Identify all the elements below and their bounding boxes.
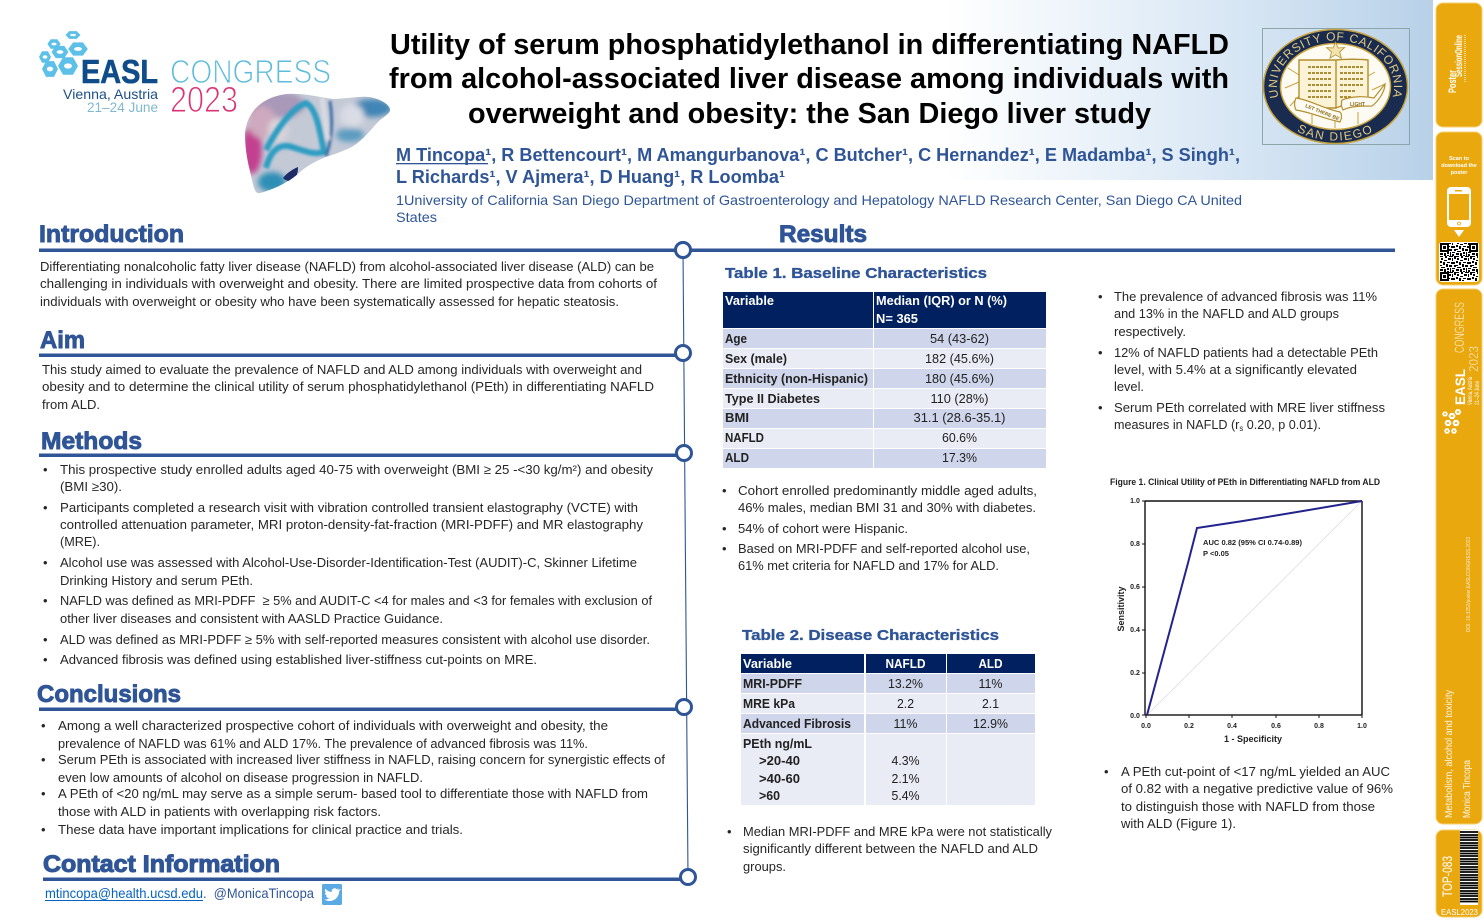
- x axis tick labels: 0.2: [1184, 723, 1194, 730]
- list: conclusions bullets: those with ALD in patients with overlapping risk factors.: [58, 804, 381, 819]
- heading: results: Results: [779, 221, 867, 248]
- table 2: disease characteristics: Variable: [743, 656, 792, 671]
- list: methods bullets: •: [43, 500, 48, 515]
- text block: aim body: obesity and to determine the clinical utility of serum phosphatidylethanol (PEth) in differentiating NAFLD: [42, 379, 654, 394]
- table 1: baseline characteristics: 17.3%: [942, 450, 977, 465]
- authors: [396, 145, 1240, 187]
- table 2 title: Table 2. Disease Characteristics: [742, 627, 999, 644]
- panel: congress and session details: [1436, 289, 1482, 824]
- table 2: disease characteristics: 5.4%: [892, 788, 920, 803]
- list: conclusions bullets: prevalence of NAFLD was 61% and ALD 17%. The prevalence of advanced fibrosis was 11%.: [58, 736, 588, 751]
- list: methods bullets: Participants completed a research visit with vibration controlled transient elastography (VCTE) with: [60, 500, 638, 515]
- affiliation: States: [396, 209, 437, 225]
- AUC annotation: AUC 0.82 (95% CI 0.74-0.89): [1203, 538, 1302, 547]
- list: PEth cut-point finding: [1104, 764, 1393, 831]
- table 2: disease characteristics: 2.1: [982, 696, 999, 711]
- text block: introduction body: [40, 259, 657, 309]
- table 1: baseline characteristics: Sex (male): [725, 351, 787, 366]
- icon: UC San Diego seal: LIGHT: [1350, 102, 1365, 108]
- heading: conclusions: Conclusions: [37, 681, 181, 708]
- panel: conclusions: [37, 681, 692, 837]
- y axis tick labels: 0.8: [1130, 541, 1140, 548]
- list: cohort findings: •: [722, 541, 727, 556]
- list: cohort findings: Cohort enrolled predominantly middle aged adults,: [738, 483, 1037, 498]
- list: fibrosis and PEth findings: 0.20, p 0.01).: [1243, 417, 1321, 432]
- list: fibrosis and PEth findings: 12% of NAFLD patients had a detectable PEth: [1114, 345, 1378, 360]
- table 1: baseline characteristics: Ethnicity (non-Hispanic): [725, 371, 868, 386]
- session topic: Metabolism, alcohol and toxicity: [1444, 690, 1455, 818]
- list: conclusions bullets: •: [41, 718, 46, 733]
- sidebar congress logo: 2023: [1466, 346, 1481, 372]
- list: disease characteristics note: [727, 824, 1052, 874]
- affiliation: 1University of California San Diego Department of Gastroenterology and Hepatology NAFLD Research Center, San Diego CA United: [396, 192, 1242, 208]
- AUC annotation: [1203, 538, 1302, 558]
- table 2: disease characteristics: 13.2%: [888, 676, 923, 691]
- list: conclusions bullets: Serum PEth is associated with increased liver stiffness in NAFLD, raising concern for synergistic effects of: [58, 752, 665, 767]
- icon: UC San Diego seal: SAN DIEGO: [1298, 124, 1372, 140]
- table 2: disease characteristics: 2.1%: [892, 771, 920, 786]
- list: PEth cut-point finding: of 0.82 with a negative predictive value of 96%: [1121, 781, 1393, 796]
- table 1: baseline characteristics: BMI: [725, 410, 749, 425]
- list: fibrosis and PEth findings: •: [1098, 345, 1103, 360]
- AUC annotation: P <0.05: [1203, 549, 1229, 558]
- authors: L Richards¹, V Ajmera¹, D Huang¹, R Loomba¹: [396, 167, 785, 187]
- table 2: disease characteristics: >40-60: [759, 771, 800, 786]
- table 1: baseline characteristics: ALD: [725, 450, 749, 465]
- table 2: disease characteristics: PEth ng/mL: [743, 736, 812, 751]
- list: conclusions bullets: •: [41, 822, 46, 837]
- list: fibrosis and PEth findings: respectively.: [1114, 324, 1186, 339]
- location: Vienna, Austria: [63, 86, 158, 102]
- panel: poster code and barcode: [1436, 830, 1482, 917]
- dates: 21–24 June: [87, 99, 158, 115]
- logo: EASL Congress 2023: [39, 31, 331, 120]
- heading: contact information: Contact Information: [43, 851, 280, 878]
- heading: introduction: Introduction: [39, 221, 184, 248]
- list: methods bullets: controlled attenuation parameter, MRI proton-density-fat-fraction (MRI-PDFF) and MR elastography: [60, 517, 644, 532]
- panel: poster session online: [1436, 3, 1482, 127]
- year: 2023: [170, 79, 238, 120]
- icon: UC San Diego seal: [1262, 28, 1410, 145]
- text block: introduction body: Differentiating nonalcoholic fatty liver disease (NAFLD) from alcohol-associated liver disease (ALD) can be: [40, 259, 654, 274]
- list: cohort findings: •: [722, 483, 727, 498]
- panel: methods: [39, 428, 692, 667]
- list: cohort findings: •: [722, 521, 727, 536]
- title: Utility of serum phosphatidylethanol in differentiating NAFLD: [390, 29, 1229, 61]
- list: conclusions bullets: [41, 718, 665, 837]
- list: methods bullets: •: [43, 555, 48, 570]
- panel: introduction: [39, 221, 690, 309]
- heading: methods: Methods: [41, 428, 142, 455]
- icon: UC San Diego seal: UNIVERSITY OF CALIFORNIA: [1268, 32, 1402, 98]
- header gradient band: [0, 0, 1433, 180]
- text block: aim body: [42, 362, 654, 412]
- list: conclusions bullets: These data have important implications for clinical practice and trials.: [58, 822, 463, 837]
- list: fibrosis and PEth findings: measures in NAFLD (r: [1114, 417, 1243, 432]
- table 1: baseline characteristics: Median (IQR) or N (%): [876, 293, 1007, 308]
- title: overweight and obesity: the San Diego liver study: [468, 98, 1151, 130]
- heading: aim: Aim: [40, 327, 85, 354]
- list: PEth cut-point finding: •: [1104, 764, 1109, 779]
- table 2: disease characteristics: >60: [759, 788, 780, 803]
- list: disease characteristics note: groups.: [743, 859, 786, 874]
- list: cohort findings: 46% males, median BMI 31 and 30% with diabetes.: [738, 500, 1036, 515]
- icon: liver illustration: [245, 94, 390, 194]
- list: fibrosis and PEth findings: level.: [1114, 379, 1144, 394]
- scan caption: [1441, 156, 1477, 176]
- panel: scan to download: [1436, 132, 1482, 285]
- list: methods bullets: Alcohol use was assessed with Alcohol-Use-Disorder-Identification-Test (AUDIT)-C, Skinner Lifetime: [60, 555, 637, 570]
- figure title: Figure 1. Clinical Utility of PEth in Differentiating NAFLD from ALD: [1110, 477, 1380, 487]
- table 2: disease characteristics: 2.2: [897, 696, 914, 711]
- list: disease characteristics note: Median MRI-PDFF and MRE kPa were not statistically: [743, 824, 1052, 839]
- text block: aim body: from ALD.: [42, 397, 100, 412]
- list: fibrosis and PEth findings: •: [1098, 400, 1103, 415]
- list: PEth cut-point finding: to distinguish those with NAFLD from those: [1121, 799, 1375, 814]
- table 2: disease characteristics: [741, 627, 1035, 805]
- table 1: baseline characteristics: NAFLD: [725, 430, 764, 445]
- y axis tick labels: 0.6: [1130, 584, 1140, 591]
- y axis tick labels: 0.4: [1130, 627, 1140, 634]
- table 1: baseline characteristics: N= 365: [876, 311, 918, 326]
- panel: aim: [39, 327, 690, 412]
- sidebar congress logo: 21–24 June: [1475, 381, 1481, 405]
- icon: twitter: [322, 884, 342, 905]
- table 1: baseline characteristics: 110 (28%): [930, 391, 988, 406]
- list: methods bullets: ALD was defined as MRI-PDFF ≥ 5% with self-reported measures consistent with alcohol use disorder.: [60, 632, 650, 647]
- table 1: baseline characteristics: 180 (45.6%): [925, 371, 994, 386]
- list: PEth cut-point finding: with ALD (Figure 1).: [1120, 816, 1236, 831]
- title: [389, 29, 1229, 130]
- x axis tick labels: [1141, 723, 1367, 730]
- list: methods bullets: •: [43, 462, 48, 477]
- table 2: disease characteristics: MRE kPa: [743, 696, 796, 711]
- table 1: baseline characteristics: 54 (43-62): [930, 331, 989, 346]
- scan caption: poster: [1451, 170, 1468, 176]
- EASL wordmark: EASL: [81, 53, 158, 90]
- list: fibrosis and PEth findings: level, with 5.4% at a significantly elevated: [1114, 362, 1357, 377]
- text block: aim body: This study aimed to evaluate the prevalence of NAFLD and ALD among individuals with overweight and: [42, 362, 642, 377]
- list: PEth cut-point finding: A PEth cut-point of <17 ng/mL yielded an AUC: [1121, 764, 1390, 779]
- list: methods bullets: NAFLD was defined as MRI-PDFF ≥ 5% and AUDIT-C <4 for males and <3 for females with exclusion of: [60, 593, 652, 608]
- list: cohort findings: 54% of cohort were Hispanic.: [738, 521, 908, 536]
- list: cohort findings: 61% met criteria for NAFLD and 17% for ALD.: [738, 558, 999, 573]
- list: fibrosis and PEth findings: s: [1239, 424, 1243, 433]
- DOI: DOI: 10.3252/poster.EASLCONGRESS.2023: [1466, 537, 1472, 632]
- list: methods bullets: other liver diseases and consistent with AASLD Practice Guidance.: [60, 611, 443, 626]
- ROC curve line: [1147, 501, 1362, 715]
- x axis tick labels: 0.4: [1227, 723, 1237, 730]
- scan caption: Scan to: [1449, 156, 1470, 162]
- x axis label: 1 - Specificity: [1224, 734, 1282, 744]
- list: methods bullets: Advanced fibrosis was defined using established liver-stiffness cut-points on MRE.: [60, 652, 537, 667]
- icon: UC San Diego seal: LET THERE BE: [1304, 103, 1341, 123]
- table 1: baseline characteristics: Variable: [725, 293, 774, 308]
- chart: ROC curve figure 1: [1110, 477, 1380, 744]
- x axis tick labels: 0.8: [1314, 723, 1324, 730]
- list: conclusions bullets: Among a well characterized prospective cohort of individuals with overweight and obesity, the: [58, 718, 608, 733]
- table 2: disease characteristics: 11%: [894, 716, 918, 731]
- icon: phone: [1447, 187, 1471, 227]
- list: conclusions bullets: •: [41, 752, 46, 767]
- table 2: disease characteristics: >20-40: [759, 753, 800, 768]
- y axis tick labels: [1130, 498, 1140, 720]
- y axis tick labels: 0.2: [1130, 670, 1140, 677]
- sidebar congress logo: [1442, 302, 1481, 434]
- table 1: baseline characteristics: 31.1 (28.6-35.1): [914, 410, 1006, 425]
- x axis tick labels: 0.0: [1141, 723, 1151, 730]
- poster code: TOP-083: [1439, 856, 1455, 897]
- list: methods bullets: This prospective study enrolled adults aged 40-75 with overweight (BMI ≥ 25 -<30 kg/m²) and obesity: [60, 462, 654, 477]
- table 1 title: Table 1. Baseline Characteristics: [725, 265, 987, 282]
- table 2: disease characteristics: MRI-PDFF: [743, 676, 802, 691]
- list: disease characteristics note: •: [727, 824, 732, 839]
- y axis tick labels: 0.0: [1130, 713, 1140, 720]
- list: methods bullets: (BMI ≥30).: [60, 479, 122, 494]
- list: conclusions bullets: A PEth of <20 ng/mL may serve as a simple serum- based tool to differentiate those with NAFLD from: [58, 786, 648, 801]
- list: cohort findings: [722, 483, 1037, 573]
- list: fibrosis and PEth findings: [1098, 289, 1385, 433]
- sidebar congress logo: Vienna, Austria: [1468, 377, 1474, 405]
- list: fibrosis and PEth findings: Serum PEth correlated with MRE liver stiffness: [1114, 400, 1385, 415]
- table 2: disease characteristics: 12.9%: [973, 716, 1008, 731]
- title: from alcohol-associated liver disease among individuals with: [389, 63, 1229, 95]
- x axis tick labels: 0.6: [1271, 723, 1281, 730]
- list: cohort findings: Based on MRI-PDFF and self-reported alcohol use,: [738, 541, 1030, 556]
- table 1: baseline characteristics: 60.6%: [942, 430, 977, 445]
- panel: results: [676, 221, 1395, 874]
- timeline connector: [683, 250, 688, 877]
- affiliation: [396, 192, 1242, 225]
- list: fibrosis and PEth findings: The prevalence of advanced fibrosis was 11%: [1114, 289, 1377, 304]
- twitter handle: . @MonicaTincopa: [203, 885, 314, 901]
- email link: mtincopa@health.ucsd.edu: [45, 885, 203, 901]
- icon: down arrow: [1454, 230, 1464, 237]
- panel: contact information: [43, 851, 696, 905]
- list: methods bullets: Drinking History and serum PEth.: [60, 573, 253, 588]
- table 2: disease characteristics: NAFLD: [886, 656, 926, 671]
- y axis tick labels: 1.0: [1130, 498, 1140, 505]
- panel: poster session online: Poster: [1447, 70, 1459, 93]
- table 2: disease characteristics: 4.3%: [892, 753, 920, 768]
- panel: poster session online: SessionOnline: [1454, 35, 1465, 77]
- table 2: disease characteristics: Advanced Fibrosis: [743, 716, 851, 731]
- list: methods bullets: •: [43, 652, 48, 667]
- list: fibrosis and PEth findings: and 13% in the NAFLD and ALD groups: [1114, 306, 1339, 321]
- icon: EASL hexagon cluster: [39, 31, 88, 77]
- list: disease characteristics note: significantly different between the NAFLD and ALD: [743, 841, 1038, 856]
- authors: M Tincopa¹, R Bettencourt¹, M Amangurbanova¹, C Butcher¹, C Hernandez¹, E Madamba¹, S Singh¹,: [396, 145, 1240, 165]
- CONGRESS wordmark: CONGRESS: [170, 53, 331, 90]
- list: methods bullets: •: [43, 593, 48, 608]
- text block: introduction body: individuals with overweight or obesity who have been systematically assessed for hepatic steatosis.: [40, 294, 619, 309]
- sidebar congress logo: CONGRESS: [1451, 302, 1467, 353]
- table 1: baseline characteristics: 182 (45.6%): [925, 351, 994, 366]
- table 1: baseline characteristics: [723, 265, 1046, 468]
- list: methods bullets: [43, 462, 654, 667]
- table 2: disease characteristics: 11%: [978, 676, 1003, 691]
- sidebar: poster session panels: [1436, 3, 1482, 917]
- table 1: baseline characteristics: Age: [725, 331, 747, 346]
- text block: introduction body: challenging in individuals with overweight and obesity. There are limited prospective data from cohorts of: [40, 276, 657, 291]
- scan caption: download the: [1441, 163, 1477, 169]
- table 1: baseline characteristics: Type II Diabetes: [725, 391, 820, 406]
- barcode: [1460, 830, 1478, 905]
- y axis label: Sensitivity: [1116, 586, 1126, 632]
- icon: QR code: [1439, 242, 1479, 282]
- list: conclusions bullets: •: [41, 786, 46, 801]
- list: conclusions bullets: even low amounts of alcohol on disease progression in NAFLD.: [58, 770, 423, 785]
- congress tag: EASL2023: [1441, 908, 1479, 917]
- table 2: disease characteristics: ALD: [978, 656, 1002, 671]
- list: methods bullets: •: [43, 632, 48, 647]
- list: fibrosis and PEth findings: •: [1098, 289, 1103, 304]
- x axis tick labels: 1.0: [1357, 723, 1367, 730]
- list: methods bullets: (MRE).: [60, 534, 100, 549]
- sidebar congress logo: EASL: [1452, 369, 1468, 405]
- presenter name: Monica Tincopa: [1462, 760, 1473, 818]
